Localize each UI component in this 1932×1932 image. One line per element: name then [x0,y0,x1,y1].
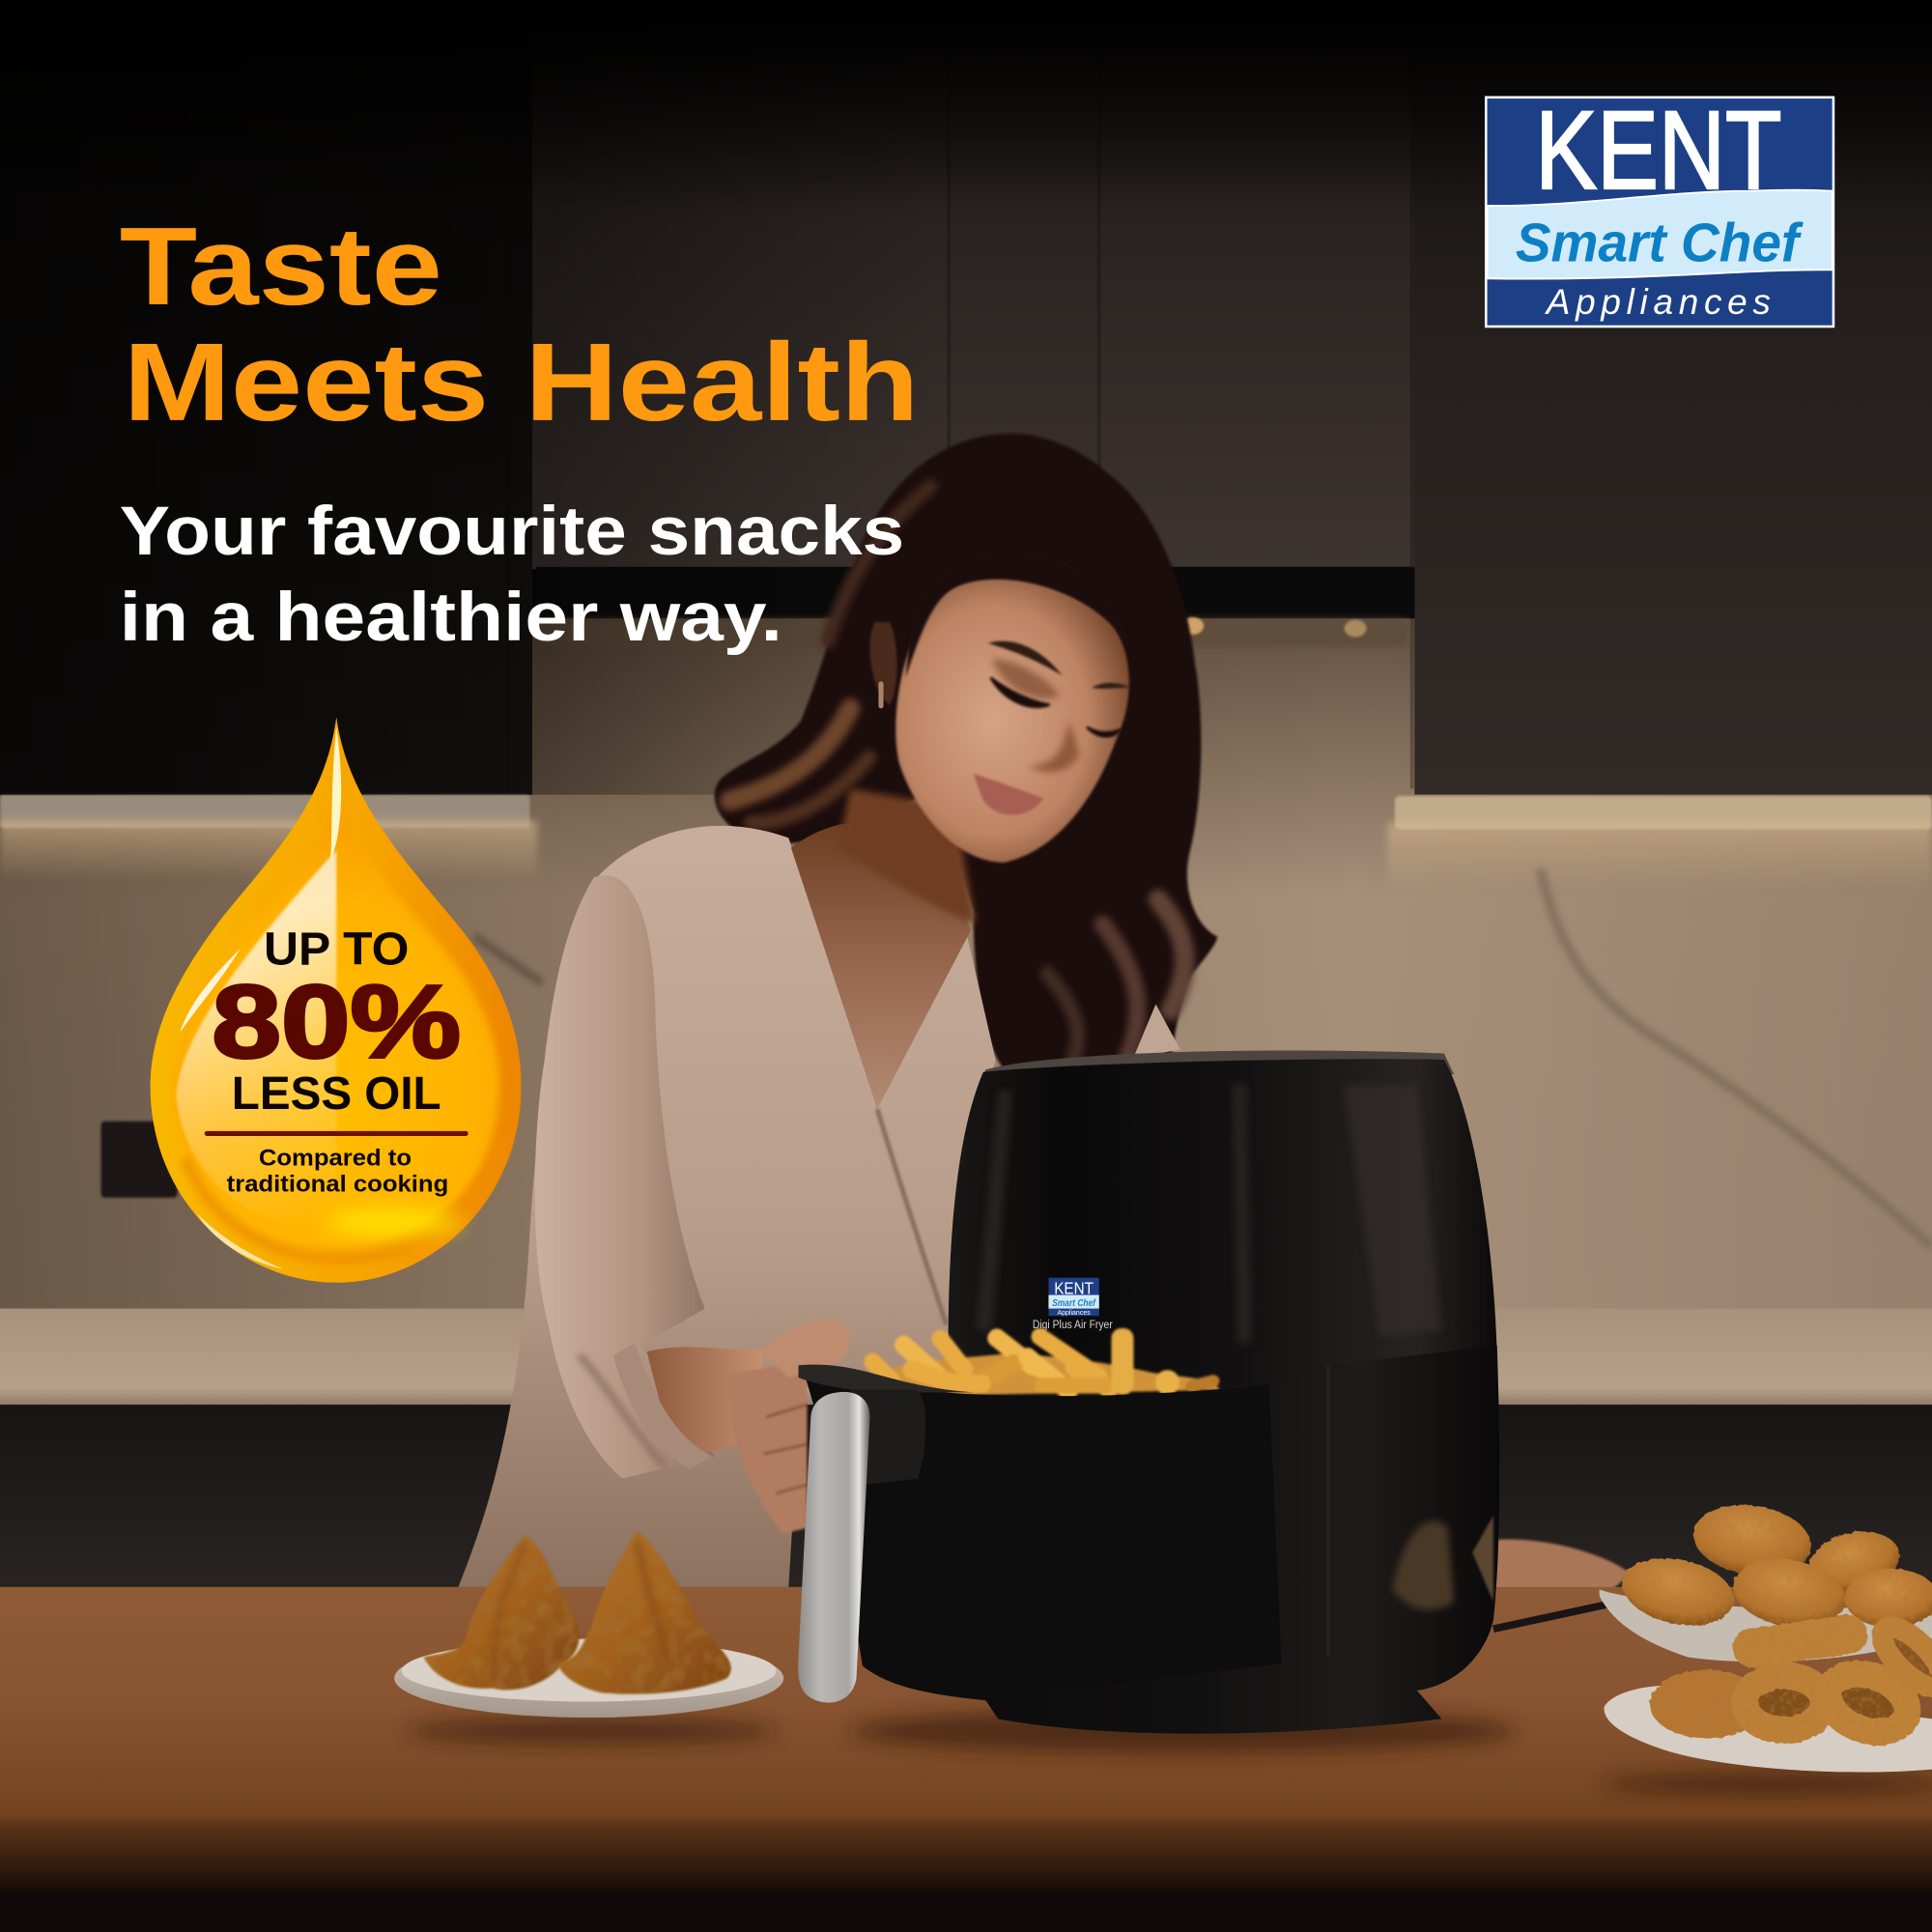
oil drop badge [151,717,522,1283]
fries pile [863,1353,1220,1397]
sleeve [535,875,715,1479]
onion rings [1650,1612,1932,1743]
badge text UP TO: UP TO [264,923,409,976]
small logo band [1048,1295,1099,1309]
small product logo [1048,1278,1099,1317]
subtitle [120,493,904,656]
plate top [402,1640,777,1701]
hand [729,1320,849,1534]
drop lower streak [197,1213,283,1269]
fryer upper body [949,1059,1497,1405]
small logo Appliances: Appliances [1057,1310,1091,1317]
cuff [613,1343,712,1468]
fryer shadow on table [850,1709,1516,1753]
logo light band [1488,190,1833,279]
drop shape [151,717,522,1283]
finger creases [764,1405,807,1493]
neck [838,788,976,924]
power cord [1493,1605,1608,1629]
ring plate shadow [1602,1773,1932,1795]
hair highlights [729,487,1184,1062]
wall and backsplash [0,616,1932,1319]
wall socket [101,1122,178,1198]
eye shadow [992,659,1060,698]
basket rim [799,1365,974,1392]
centre upper cabinet [532,0,1414,569]
logo blue field [1488,99,1833,326]
face [895,578,1129,863]
marble vein right [1540,868,1932,1247]
basket front [804,1370,1282,1700]
plate [394,1638,783,1718]
right light glow [1387,823,1932,892]
hood spot light left [1181,617,1204,635]
logo Appliances: Appliances [1545,282,1771,322]
basket seam [1327,1365,1329,1658]
right samosa [558,1531,731,1694]
badge divider [205,1131,469,1136]
left under-cabinet light [0,795,529,828]
wooden table [0,1587,1932,1932]
bowl [1600,1589,1932,1662]
title [120,205,920,444]
drop yellow glow [327,1208,462,1236]
badge text 80%: 80% [212,963,461,1079]
countertop [0,1309,1932,1407]
badge text LESS OIL: LESS OIL [232,1067,441,1120]
left samosa fold [495,1543,525,1678]
upper finger [761,1320,849,1378]
hood light strip [540,620,1408,647]
onion ring plate [1602,1612,1932,1795]
brand logo [1485,89,1834,327]
wall shading [0,616,1932,1319]
subtitle line 1: Your favourite snacks [120,493,904,570]
earring [878,681,884,708]
cabinet seams [508,0,1412,788]
badge text traditional: traditional cooking [227,1171,448,1197]
right samosa fold [637,1540,668,1658]
wrap fold [877,1109,947,1324]
drop lower rim [185,1140,505,1260]
fryer top rim [980,1050,1454,1084]
nuggets [1616,1498,1932,1635]
fryer lower body [813,1346,1499,1734]
fryer right reflection [1472,1516,1493,1602]
fringe hair [906,551,1131,678]
fries [861,1324,1221,1405]
left upper cabinet [0,0,532,795]
fryer highlights [976,1084,1441,1343]
marble vein left [474,936,542,983]
lower cabinets [0,1405,1932,1596]
drop inner body [172,788,499,1247]
reflection on basket [1392,1521,1454,1610]
nugget bowl [1493,1498,1932,1662]
left light glow [0,820,537,882]
ear [870,622,897,705]
drop tip highlight [330,727,341,863]
chest skin [791,822,971,1109]
right eye [1087,727,1122,736]
blouse body [458,826,996,1587]
left eyebrow [988,641,1062,675]
logo KENT: KENT [1535,89,1781,213]
right under-cabinet light [1395,796,1932,829]
drop glossy highlight [176,850,336,1233]
left samosa [424,1537,579,1690]
product name: Digi Plus Air Fryer [1033,1318,1113,1331]
air fryer [798,1050,1499,1734]
logo Smart Chef: Smart Chef [1516,212,1804,272]
lips [974,774,1043,815]
plate shadow [407,1719,777,1744]
drop left streak [180,949,241,1033]
ring plate [1605,1686,1932,1773]
handle silver [798,1392,870,1703]
logo frame [1485,96,1834,327]
nose shadow [1029,721,1079,772]
woman [458,434,1629,1609]
hood spot light right [1345,620,1367,637]
forearm [647,1347,764,1462]
badge text compared: Compared to [259,1146,412,1172]
small logo plate [1048,1278,1099,1316]
handle bracket [850,1390,925,1485]
right eyebrow [1092,683,1131,689]
left cabinet darkening [0,0,936,795]
samosa plate [394,1531,783,1744]
title line 2: Meets Health [124,321,920,444]
top darkening overlay [0,0,1932,210]
left eye [991,678,1050,707]
back of hand [729,1361,807,1534]
sleeve fold [579,1355,666,1466]
range hood [536,567,1414,618]
small logo KENT: KENT [1054,1278,1094,1297]
blouse right shoulder [1133,1005,1180,1057]
title line 1: Taste [120,205,442,328]
second hand on right [1491,1540,1629,1609]
right upper cabinet [1414,0,1932,795]
small logo Smart Chef: Smart Chef [1052,1298,1096,1309]
subtitle line 2: in a healthier way. [120,579,782,656]
back hair [715,434,1217,1069]
